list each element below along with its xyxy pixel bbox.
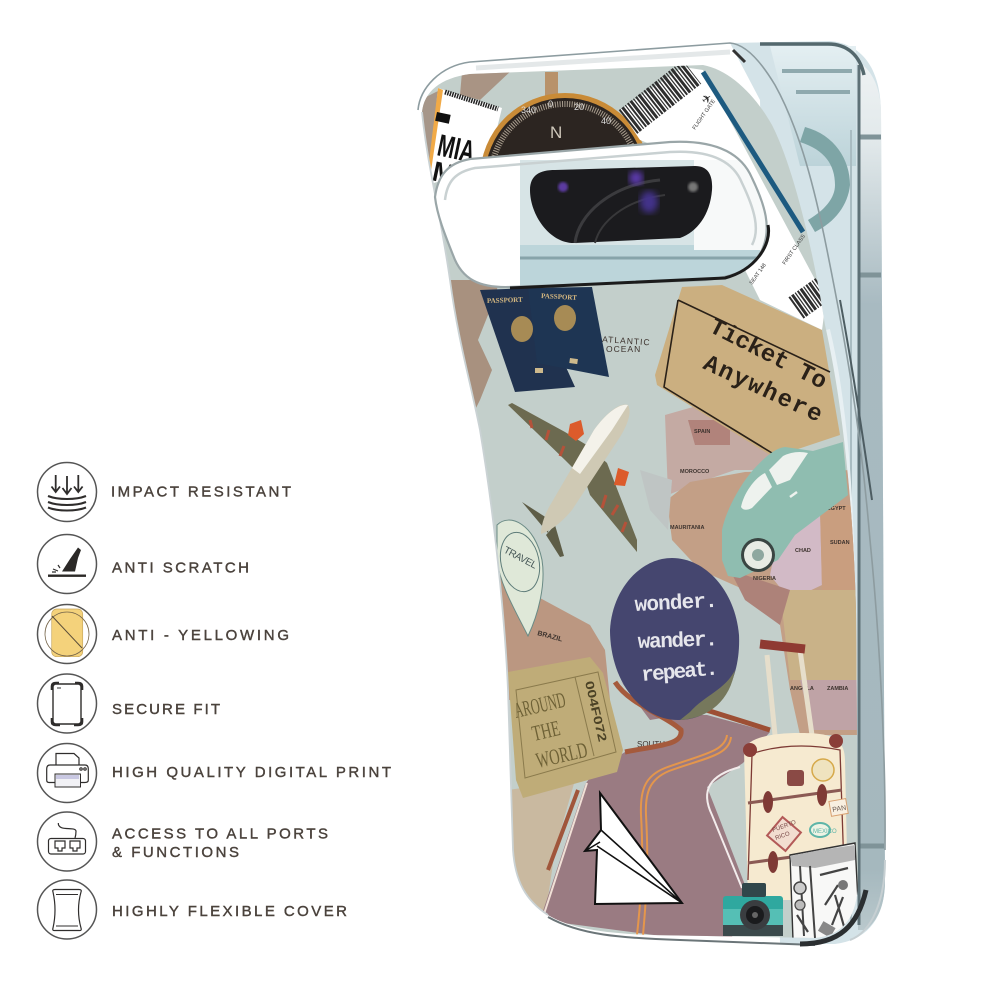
red luggage: RICO: [775, 831, 791, 842]
boarding pass: Miami: [430, 88, 502, 183]
airplane: [508, 403, 637, 557]
feature: anti scratch: ANTI SCRATCH: [112, 560, 249, 576]
world map background: ANGOLA: [790, 686, 814, 692]
passports: [480, 287, 609, 392]
boarding pass: first class: FIRST CLASS: [782, 233, 807, 266]
compass: N: [550, 123, 562, 142]
wonder wander repeat sticker: [610, 558, 739, 720]
teal camera sticker: [723, 883, 783, 936]
feature: anti yellowing: ANTI - YELLOWING: [112, 627, 289, 644]
around the world ticket: THE: [530, 715, 562, 746]
world map background: CHAD: [795, 548, 811, 554]
feature: anti yellowing: [38, 604, 289, 664]
world map background: MOROCCO: [680, 469, 710, 475]
compass: 0: [548, 99, 553, 109]
feature: impact resistant: [38, 462, 291, 522]
boarding pass: first class: SEAT 148: [749, 263, 768, 286]
passports: PASSPORT: [541, 292, 577, 302]
camera bump: [435, 142, 770, 288]
road: [540, 680, 770, 945]
boarding pass: Miami: MIA: [435, 128, 478, 170]
feature list: [38, 462, 391, 939]
feature: ports and functions: ACCESS TO ALL PORTS: [112, 826, 328, 842]
world map background: MAURITANIA: [670, 525, 704, 531]
around the world ticket: [508, 657, 623, 798]
wonder wander repeat sticker: wonder.: [634, 591, 718, 618]
feature: flexible cover: HIGHLY FLEXIBLE COVER: [112, 903, 347, 920]
boarding pass: Miami: M: [430, 156, 458, 190]
world map background: BRAZIL: [536, 630, 564, 644]
phone behind the case: [730, 41, 885, 944]
wonder wander repeat sticker: repeat.: [641, 658, 719, 688]
feature: impact resistant: IMPACT RESISTANT: [111, 484, 291, 500]
travel pin sticker: [495, 520, 545, 636]
compass: 40: [601, 116, 611, 126]
kraft ticket sticker: Anywhere: [699, 351, 826, 429]
camera lens: [530, 166, 712, 243]
world map background: OCEAN: [606, 344, 641, 354]
compass: 20: [574, 102, 584, 112]
boarding pass: first class: [620, 67, 826, 330]
feature: digital print: [38, 744, 391, 802]
around the world ticket: WORLD: [534, 737, 590, 773]
world map background: NIGERIA: [753, 576, 776, 582]
around the world ticket: 004F072: [582, 680, 610, 743]
paper plane: [585, 793, 682, 904]
compass: [482, 72, 642, 157]
boarding pass: first class: ✈: [699, 90, 715, 107]
feature: ports and functions: [38, 812, 328, 871]
compass: 340: [521, 105, 536, 115]
clear case outline: [418, 43, 885, 945]
red luggage: [743, 644, 848, 900]
feature: secure fit: [38, 674, 220, 733]
feature: flexible cover: [38, 880, 347, 939]
world map background: ZAMBIA: [827, 686, 848, 692]
boarding pass: first class: FLIGHT GATE: [692, 98, 717, 131]
red luggage: PAN: [832, 805, 847, 814]
wonder wander repeat sticker: wander.: [637, 629, 718, 655]
passports: PASSPORT: [487, 296, 523, 305]
feature: digital print: HIGH QUALITY DIGITAL PRINT: [112, 764, 391, 781]
feature: anti scratch: [38, 534, 249, 594]
world map background: SPAIN: [694, 429, 710, 435]
printed case back: [410, 60, 870, 950]
red luggage: MEXICO: [813, 829, 837, 835]
kraft ticket sticker: [655, 285, 840, 455]
feature: ports and functions: & FUNCTIONS: [112, 844, 239, 861]
red luggage: PUERTO: [772, 820, 797, 834]
world map background: ATLANTIC: [602, 334, 651, 347]
feature: secure fit: SECURE FIT: [112, 701, 220, 718]
product infographic: [36, 41, 886, 946]
world map background: [410, 60, 870, 950]
world map background: EGYPT: [827, 506, 846, 512]
world map background: SOUTH: [637, 740, 665, 749]
car sticker: [722, 442, 848, 578]
travel pin sticker: TRAVEL: [502, 545, 539, 572]
around the world ticket: AROUND: [512, 687, 568, 723]
kraft ticket sticker: Ticket To: [704, 314, 831, 396]
world map background: SUDAN: [830, 540, 850, 546]
sketch suitcase: [790, 843, 860, 940]
